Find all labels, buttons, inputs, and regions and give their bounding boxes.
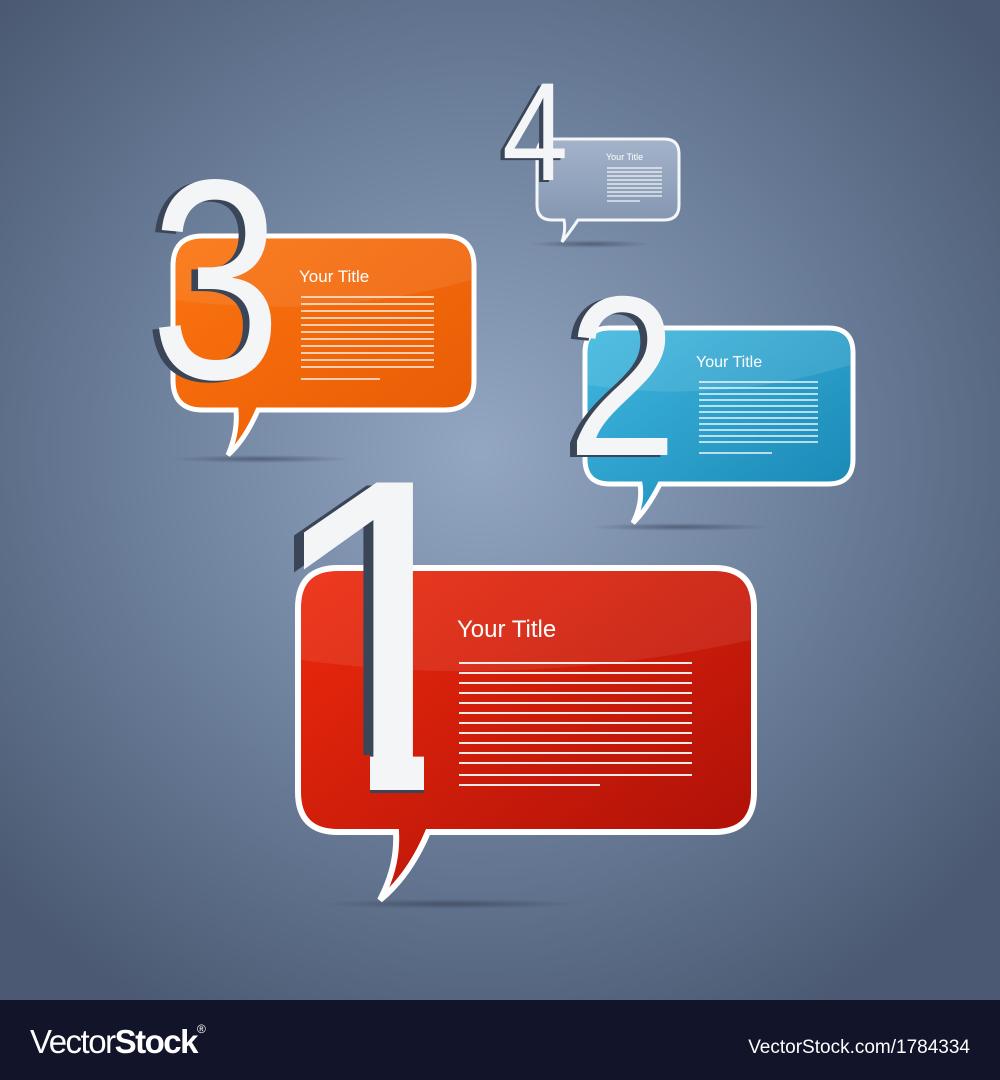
bubble 4 text: Your Title (606, 152, 643, 162)
number 1: 1 (261, 385, 510, 885)
footer url: VectorStock.com/1784334 (748, 1037, 970, 1058)
bubble 4 (498, 53, 679, 248)
number 1 (294, 482, 424, 793)
bubble 1 text: Your Title (457, 616, 556, 643)
footer logo: ® (197, 1022, 206, 1036)
bubble 1 (294, 482, 757, 908)
footer bar (0, 1000, 1000, 1080)
bubble 2 text: Your Title (696, 354, 762, 371)
number 4: 4 (502, 53, 568, 210)
bubble 3 text (299, 267, 434, 379)
number 3: 3 (150, 121, 282, 439)
number 4: 4 (498, 55, 564, 212)
number 3: 3 (143, 123, 275, 441)
number 1: 1 (251, 388, 500, 888)
bubble 3 text: Your Title (299, 267, 369, 286)
footer logo: VectorStock (30, 1023, 197, 1060)
bubble 3 (143, 121, 474, 463)
number 2: 2 (560, 252, 670, 506)
bubble 2 (560, 250, 853, 531)
bubble 4 text (606, 152, 662, 201)
number 2: 2 (567, 250, 677, 504)
bubble 2 text (696, 354, 818, 453)
